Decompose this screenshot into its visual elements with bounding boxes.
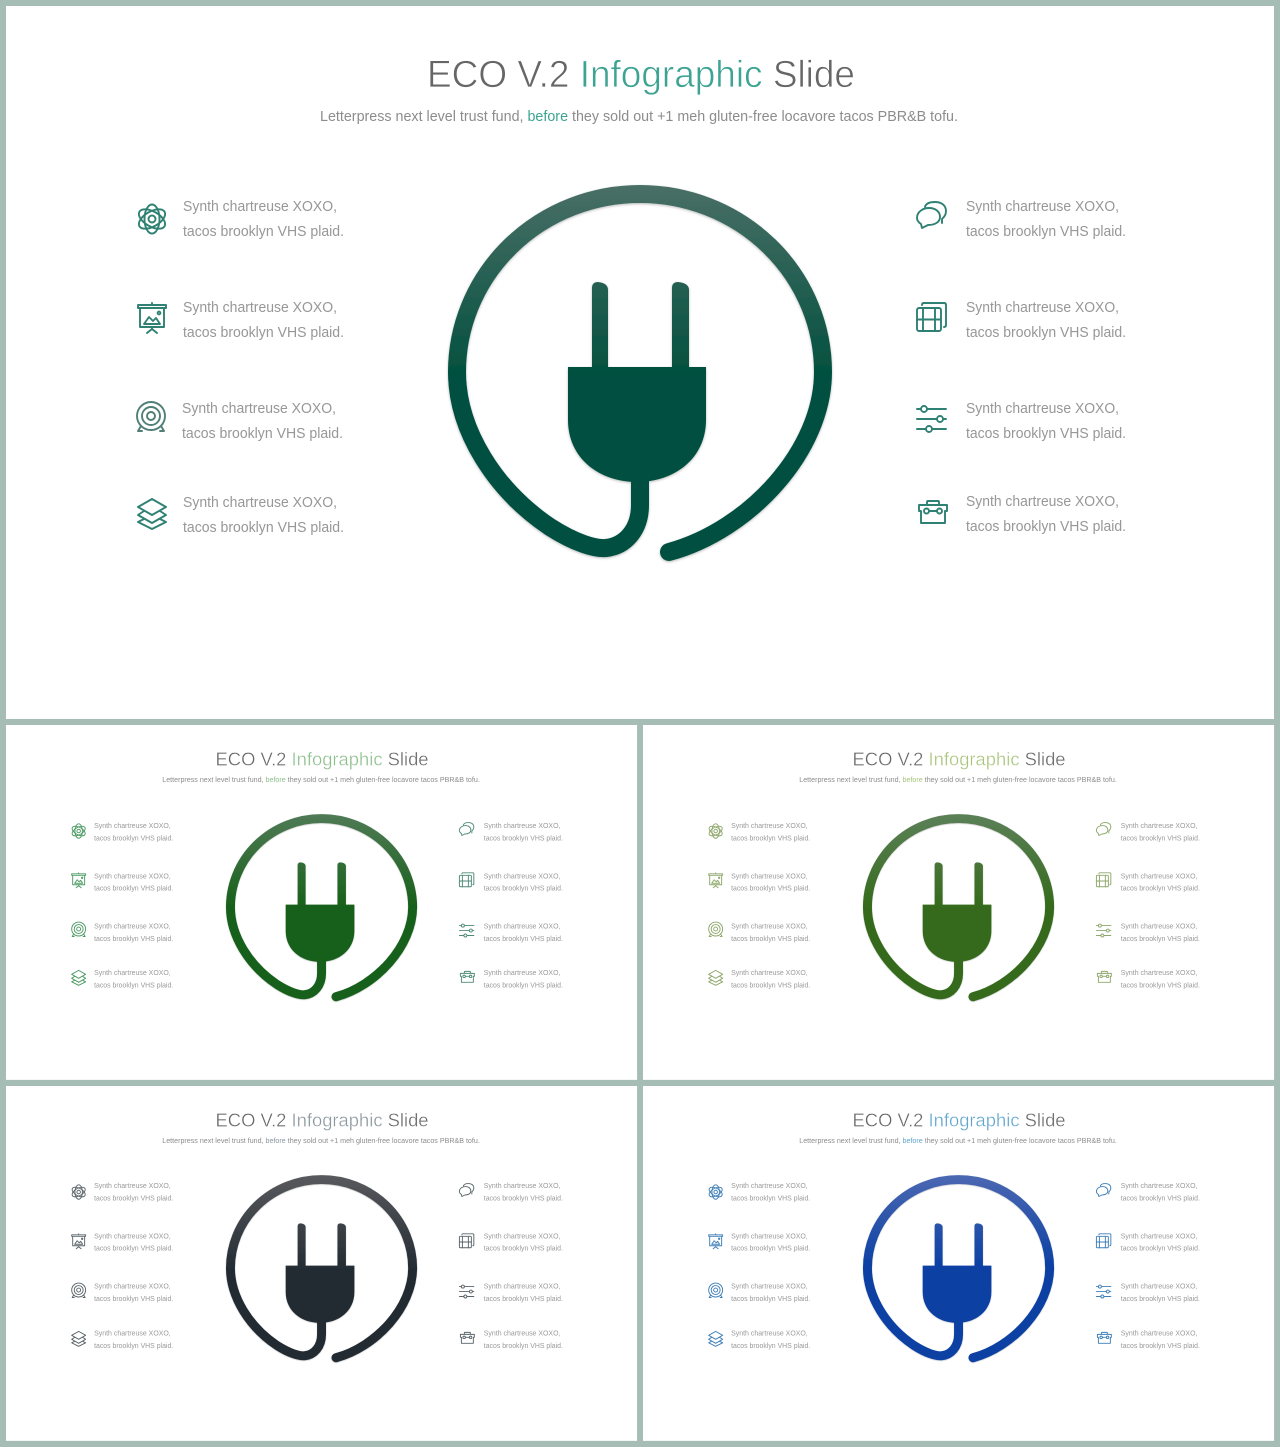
item: atom: tacos brooklyn VHS plaid.	[183, 224, 344, 240]
title: ECO V.2 Infographic Slide	[427, 54, 855, 96]
icon: plug with circular cord	[867, 819, 1050, 997]
left list	[71, 1181, 173, 1350]
panel: dark slate slide	[6, 1086, 637, 1441]
item: sliders: Synth chartreuse XOXO,	[1121, 1282, 1197, 1291]
right list	[917, 199, 1126, 535]
item: atom	[71, 821, 173, 842]
item: layers	[138, 495, 344, 536]
icon: plug with circular cord	[867, 1180, 1050, 1358]
item: presentation board: Synth chartreuse XOXO,	[94, 871, 171, 880]
item: atom	[708, 821, 810, 842]
item: layers: tacos brooklyn VHS plaid.	[94, 1341, 173, 1350]
item: atom	[136, 199, 344, 240]
item: atom: Synth chartreuse XOXO,	[731, 821, 808, 830]
item: presentation board: tacos brooklyn VHS plaid.	[731, 884, 810, 893]
item: film: Synth chartreuse XOXO,	[484, 871, 560, 880]
item: target: Synth chartreuse XOXO,	[731, 922, 808, 931]
item: chat: Synth chartreuse XOXO,	[966, 199, 1119, 215]
title: ECO V.2 Infographic Slide	[216, 749, 429, 770]
panel: green slide	[6, 725, 637, 1080]
item: briefcase: tacos brooklyn VHS plaid.	[484, 1341, 563, 1350]
item: presentation board: Synth chartreuse XOXO,	[183, 300, 337, 316]
item: presentation board: tacos brooklyn VHS plaid.	[94, 884, 173, 893]
item: film: Synth chartreuse XOXO,	[966, 300, 1119, 316]
item: briefcase	[1097, 1328, 1200, 1350]
item: film	[1096, 1231, 1200, 1253]
item: atom: tacos brooklyn VHS plaid.	[94, 833, 173, 842]
subtitle: Letterpress next level trust fund, before they sold out +1 meh gluten-free locavore tacos PBR&B tofu.	[799, 775, 1117, 784]
item: sliders	[459, 1282, 563, 1303]
item: target	[72, 1282, 173, 1303]
right list	[1096, 1181, 1200, 1350]
item: presentation board	[709, 1231, 810, 1253]
item: presentation board	[72, 871, 173, 893]
item: target: tacos brooklyn VHS plaid.	[731, 1294, 810, 1303]
item: sliders: tacos brooklyn VHS plaid.	[484, 934, 563, 943]
item: sliders: tacos brooklyn VHS plaid.	[484, 1294, 563, 1303]
item: film	[459, 1231, 563, 1253]
item: layers: Synth chartreuse XOXO,	[94, 968, 171, 977]
item: presentation board: tacos brooklyn VHS plaid.	[183, 325, 344, 341]
item: chat: tacos brooklyn VHS plaid.	[966, 224, 1126, 240]
item: atom: Synth chartreuse XOXO,	[94, 1181, 171, 1190]
item: sliders: Synth chartreuse XOXO,	[484, 922, 560, 931]
item: chat: tacos brooklyn VHS plaid.	[484, 833, 563, 842]
right list	[1096, 821, 1200, 989]
item: target: Synth chartreuse XOXO,	[94, 1282, 171, 1291]
item: film	[1096, 871, 1200, 893]
item: chat: tacos brooklyn VHS plaid.	[1121, 1193, 1200, 1202]
item: chat: Synth chartreuse XOXO,	[484, 1181, 560, 1190]
item: sliders	[459, 922, 563, 943]
title: ECO V.2 Infographic Slide	[853, 749, 1066, 770]
item: briefcase	[1097, 968, 1200, 989]
item: atom: tacos brooklyn VHS plaid.	[94, 1193, 173, 1202]
item: sliders	[917, 401, 1126, 442]
item: presentation board: tacos brooklyn VHS plaid.	[94, 1244, 173, 1253]
item: briefcase: tacos brooklyn VHS plaid.	[1121, 1341, 1200, 1350]
item: briefcase: Synth chartreuse XOXO,	[1121, 1328, 1197, 1337]
item: presentation board	[138, 300, 344, 341]
item: layers	[709, 1328, 810, 1350]
item: briefcase	[460, 1328, 563, 1350]
item: chat: Synth chartreuse XOXO,	[1121, 1181, 1197, 1190]
item: chat	[917, 199, 1126, 240]
item: film	[917, 300, 1126, 341]
item: target	[709, 922, 810, 943]
panel: olive slide	[643, 725, 1274, 1080]
item: sliders: tacos brooklyn VHS plaid.	[1121, 934, 1200, 943]
item: atom: tacos brooklyn VHS plaid.	[731, 833, 810, 842]
icon: plug with circular cord	[457, 194, 823, 552]
item: target	[137, 401, 343, 442]
item: chat	[459, 821, 563, 842]
item: film: Synth chartreuse XOXO,	[1121, 1231, 1197, 1240]
item: sliders	[1096, 1282, 1200, 1303]
item: film: tacos brooklyn VHS plaid.	[484, 1244, 563, 1253]
item: sliders: Synth chartreuse XOXO,	[1121, 922, 1197, 931]
item: atom: Synth chartreuse XOXO,	[183, 199, 337, 215]
item: target: Synth chartreuse XOXO,	[731, 1282, 808, 1291]
item: chat	[1096, 821, 1200, 842]
item: briefcase: Synth chartreuse XOXO,	[484, 968, 560, 977]
item: sliders: Synth chartreuse XOXO,	[966, 401, 1119, 417]
item: presentation board: Synth chartreuse XOXO,	[731, 871, 808, 880]
item: layers: Synth chartreuse XOXO,	[183, 495, 337, 511]
subtitle: Letterpress next level trust fund, before they sold out +1 meh gluten-free locavore tacos PBR&B tofu.	[320, 109, 958, 125]
item: atom	[71, 1181, 173, 1202]
left list	[708, 1181, 810, 1350]
panel: main teal slide	[6, 6, 1274, 719]
item: atom: tacos brooklyn VHS plaid.	[731, 1193, 810, 1202]
subtitle: Letterpress next level trust fund, before they sold out +1 meh gluten-free locavore tacos PBR&B tofu.	[799, 1136, 1117, 1145]
item: presentation board: tacos brooklyn VHS plaid.	[731, 1244, 810, 1253]
item: layers: Synth chartreuse XOXO,	[731, 1328, 808, 1337]
panel: blue slide	[643, 1086, 1274, 1441]
item: target	[709, 1282, 810, 1303]
item: target	[72, 922, 173, 943]
item: layers: tacos brooklyn VHS plaid.	[731, 1341, 810, 1350]
item: layers: Synth chartreuse XOXO,	[94, 1328, 171, 1337]
right list	[459, 821, 563, 989]
item: briefcase: Synth chartreuse XOXO,	[1121, 968, 1197, 977]
item: film	[459, 871, 563, 893]
item: briefcase	[919, 494, 1126, 535]
item: atom: Synth chartreuse XOXO,	[731, 1181, 808, 1190]
item: layers	[72, 1328, 173, 1350]
item: atom: Synth chartreuse XOXO,	[94, 821, 171, 830]
subtitle: Letterpress next level trust fund, before they sold out +1 meh gluten-free locavore tacos PBR&B tofu.	[162, 775, 480, 784]
item: layers: tacos brooklyn VHS plaid.	[94, 980, 173, 989]
item: briefcase: tacos brooklyn VHS plaid.	[1121, 980, 1200, 989]
title: ECO V.2 Infographic Slide	[853, 1110, 1066, 1131]
item: presentation board	[72, 1231, 173, 1253]
item: target: Synth chartreuse XOXO,	[182, 401, 336, 417]
item: chat: tacos brooklyn VHS plaid.	[1121, 833, 1200, 842]
left list	[708, 821, 810, 989]
item: sliders	[1096, 922, 1200, 943]
item: sliders: tacos brooklyn VHS plaid.	[1121, 1294, 1200, 1303]
left list	[136, 199, 344, 536]
item: layers	[709, 968, 810, 989]
item: target: tacos brooklyn VHS plaid.	[94, 934, 173, 943]
item: layers: tacos brooklyn VHS plaid.	[731, 980, 810, 989]
item: film: tacos brooklyn VHS plaid.	[484, 884, 563, 893]
item: presentation board: Synth chartreuse XOXO,	[731, 1231, 808, 1240]
item: briefcase: tacos brooklyn VHS plaid.	[484, 980, 563, 989]
item: presentation board	[709, 871, 810, 893]
item: film: tacos brooklyn VHS plaid.	[1121, 884, 1200, 893]
item: film: tacos brooklyn VHS plaid.	[966, 325, 1126, 341]
item: briefcase	[460, 968, 563, 989]
item: target: tacos brooklyn VHS plaid.	[182, 426, 343, 442]
right list	[459, 1181, 563, 1350]
item: chat: Synth chartreuse XOXO,	[484, 821, 560, 830]
icon: plug with circular cord	[230, 1180, 413, 1358]
item: briefcase: tacos brooklyn VHS plaid.	[966, 519, 1126, 535]
item: sliders: Synth chartreuse XOXO,	[484, 1282, 560, 1291]
icon: plug with circular cord	[230, 819, 413, 997]
item: film: Synth chartreuse XOXO,	[1121, 871, 1197, 880]
item: layers: tacos brooklyn VHS plaid.	[183, 520, 344, 536]
item: film: Synth chartreuse XOXO,	[484, 1231, 560, 1240]
item: target: tacos brooklyn VHS plaid.	[731, 934, 810, 943]
item: chat	[1096, 1181, 1200, 1202]
item: target: Synth chartreuse XOXO,	[94, 922, 171, 931]
item: chat: tacos brooklyn VHS plaid.	[484, 1193, 563, 1202]
subtitle: Letterpress next level trust fund, before they sold out +1 meh gluten-free locavore tacos PBR&B tofu.	[162, 1136, 480, 1145]
title: ECO V.2 Infographic Slide	[216, 1110, 429, 1131]
item: layers	[72, 968, 173, 989]
item: briefcase: Synth chartreuse XOXO,	[484, 1328, 560, 1337]
left list	[71, 821, 173, 989]
item: layers: Synth chartreuse XOXO,	[731, 968, 808, 977]
item: sliders: tacos brooklyn VHS plaid.	[966, 426, 1126, 442]
item: chat	[459, 1181, 563, 1202]
item: presentation board: Synth chartreuse XOXO,	[94, 1231, 171, 1240]
item: atom	[708, 1181, 810, 1202]
item: target: tacos brooklyn VHS plaid.	[94, 1294, 173, 1303]
item: chat: Synth chartreuse XOXO,	[1121, 821, 1197, 830]
item: film: tacos brooklyn VHS plaid.	[1121, 1244, 1200, 1253]
item: briefcase: Synth chartreuse XOXO,	[966, 494, 1119, 510]
